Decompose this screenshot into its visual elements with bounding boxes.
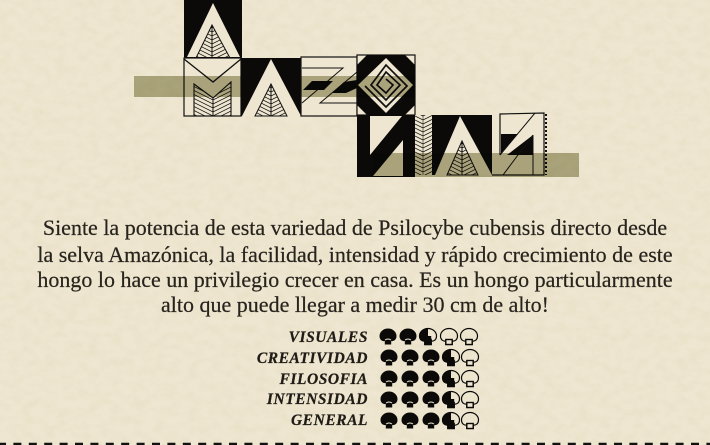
letter A middle — [241, 58, 301, 116]
olive band upper left — [134, 76, 241, 97]
text: alto que puede llegar a medir 30 cm de alto! — [161, 292, 549, 317]
hatched stripe — [415, 115, 432, 175]
letter A top — [184, 0, 242, 58]
letter M — [184, 58, 241, 116]
row: visuales — [380, 328, 478, 344]
row: filosofia — [380, 370, 478, 386]
letter O diamond with spiral — [356, 54, 416, 116]
row: intensidad — [380, 392, 478, 408]
text: hongo lo hace un privilegio crecer en casa. Es un hongo particularmente — [37, 267, 673, 292]
text: FILOSOFIA — [279, 371, 368, 388]
text: GENERAL — [291, 412, 368, 429]
text: INTENSIDAD — [267, 391, 368, 408]
description text — [37, 215, 673, 317]
letter N — [357, 115, 415, 177]
text: VISUALES — [289, 329, 368, 346]
letter A right — [432, 115, 492, 175]
rating labels — [257, 329, 368, 429]
row: general — [380, 412, 478, 428]
letter N reversed — [492, 113, 546, 175]
row: creatividad — [380, 350, 478, 366]
olive band upper right — [301, 76, 415, 97]
text: Siente la potencia de esta variedad de Psilocybe cubensis directo desde — [43, 215, 667, 240]
olive band lower — [373, 153, 579, 177]
text: CREATIVIDAD — [257, 350, 368, 367]
letter Z — [301, 57, 357, 116]
logo: AMAZONIAN geometric lettering — [134, 0, 579, 177]
text: la selva Amazónica, la facilidad, intensidad y rápido crecimiento de este — [37, 242, 673, 267]
